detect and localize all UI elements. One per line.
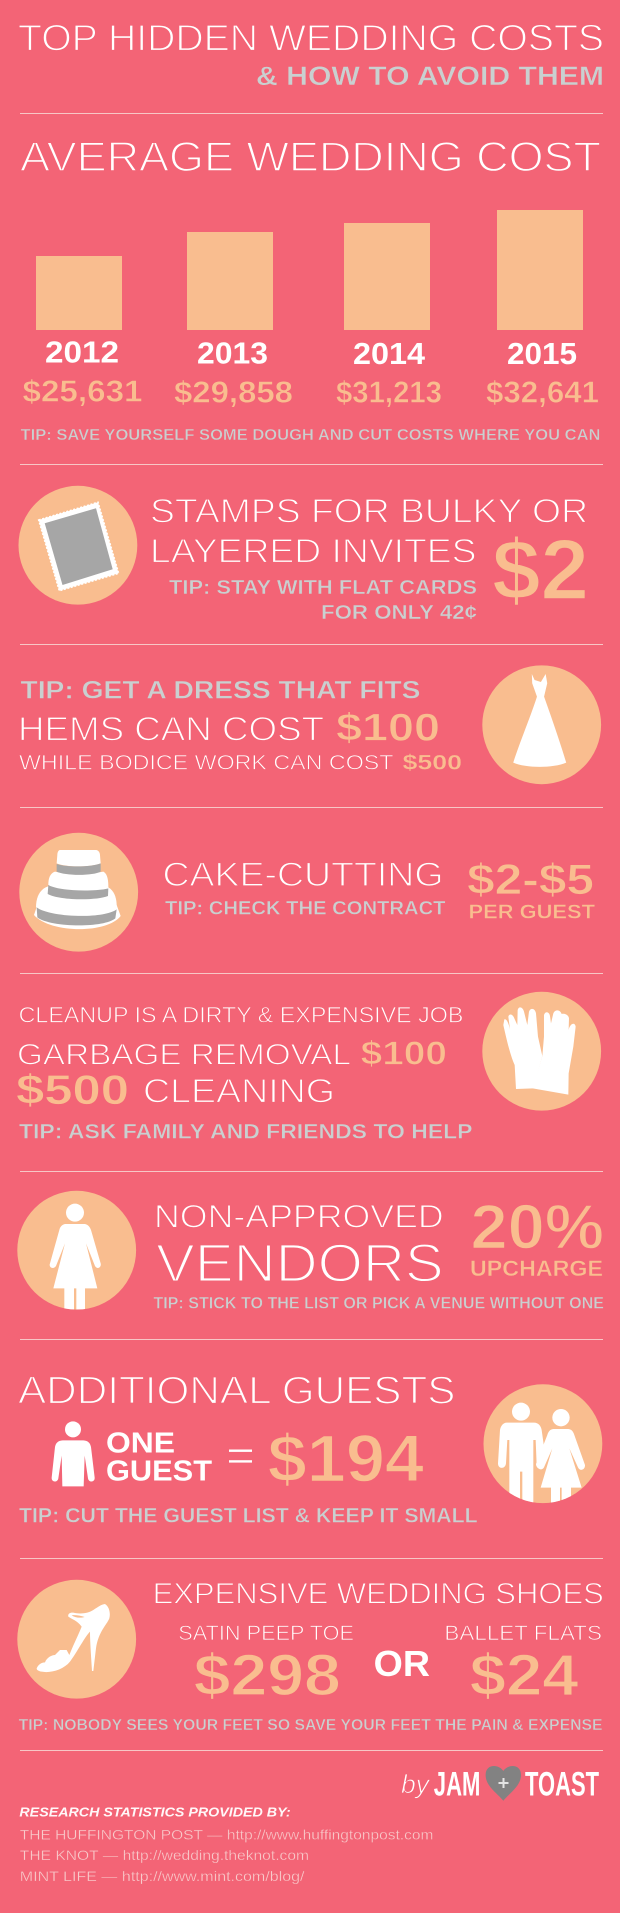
cost: PER GUEST bbox=[468, 901, 595, 923]
icon: stamp bbox=[18, 486, 137, 605]
ballet flats price: $24 bbox=[470, 1643, 578, 1708]
garbage removal cost: GARBAGE REMOVAL bbox=[17, 1039, 351, 1072]
heading: LAYERED INVITES bbox=[150, 532, 476, 570]
heading: STAMPS FOR BULKY OR bbox=[150, 493, 588, 531]
source list: THE KNOT — http://wedding.theknot.com bbox=[20, 1847, 309, 1863]
satin peep toe price: SATIN PEEP TOE bbox=[178, 1622, 354, 1645]
cost: $194 bbox=[268, 1422, 424, 1496]
source list: THE HUFFINGTON POST — http://www.huffingtonpost.com bbox=[20, 1826, 433, 1842]
header bbox=[18, 18, 604, 91]
one guest label bbox=[106, 1428, 212, 1488]
heading: ADDITIONAL GUESTS bbox=[18, 1369, 456, 1412]
source list: MINT LIFE — http://www.mint.com/blog/ bbox=[20, 1868, 305, 1884]
panel: dress bbox=[18, 665, 601, 784]
hem cost: $100 bbox=[336, 707, 440, 750]
cost: 20% bbox=[470, 1192, 604, 1262]
garbage removal cost bbox=[17, 1035, 447, 1072]
cost values: $25,631 bbox=[22, 374, 142, 409]
heading: NON-APPROVED bbox=[154, 1198, 444, 1234]
tip bbox=[169, 576, 477, 624]
icon: heart bbox=[486, 1766, 521, 1801]
tip: TIP: CUT THE GUEST LIST & KEEP IT SMALL bbox=[19, 1504, 478, 1527]
cost: UPCHARGE bbox=[470, 1256, 603, 1281]
year labels: 2012 bbox=[45, 335, 119, 370]
year labels: 2014 bbox=[353, 336, 426, 371]
logo: jam + toast: by bbox=[401, 1769, 431, 1799]
logo: jam + toast bbox=[401, 1766, 599, 1804]
tip: TIP: ASK FAMILY AND FRIENDS TO HELP bbox=[19, 1121, 472, 1144]
heading: AVERAGE WEDDING COST bbox=[20, 133, 601, 180]
tip: TIP: STICK TO THE LIST OR PICK A VENUE WITHOUT ONE bbox=[153, 1294, 604, 1312]
heading bbox=[150, 493, 588, 570]
sources bbox=[19, 1805, 433, 1884]
panel: stamps bbox=[18, 486, 589, 624]
heading: CAKE-CUTTING bbox=[162, 856, 444, 894]
icon: person bbox=[52, 1421, 95, 1486]
cleaning cost: $500 bbox=[16, 1066, 129, 1113]
icon: shoe bbox=[17, 1580, 136, 1699]
panel: cleanup bbox=[16, 992, 601, 1144]
panel: wedding shoes bbox=[17, 1577, 604, 1734]
bar chart bbox=[36, 210, 583, 330]
cleaning cost bbox=[16, 1066, 335, 1113]
year labels bbox=[45, 335, 577, 371]
cost: $2 bbox=[492, 523, 589, 618]
hem cost: HEMS CAN COST bbox=[18, 711, 324, 749]
icon: dress bbox=[482, 665, 601, 784]
cost values: $29,858 bbox=[174, 374, 293, 410]
cost bbox=[467, 856, 595, 923]
tip: TIP: GET A DRESS THAT FITS bbox=[20, 677, 420, 705]
garbage removal cost: $100 bbox=[361, 1035, 447, 1072]
bodice cost: WHILE BODICE WORK CAN COST bbox=[19, 750, 394, 774]
satin peep toe price bbox=[178, 1622, 354, 1708]
tip: FOR ONLY 42¢ bbox=[321, 601, 477, 624]
tip: TIP: STAY WITH FLAT CARDS bbox=[169, 576, 477, 599]
one guest label: ONE bbox=[106, 1428, 175, 1460]
subtitle: & HOW TO AVOID THEM bbox=[256, 61, 604, 91]
heading: EXPENSIVE WEDDING SHOES bbox=[153, 1577, 604, 1610]
tip: TIP: CHECK THE CONTRACT bbox=[165, 898, 446, 919]
panel: average wedding cost bbox=[20, 133, 601, 444]
cost: $2-$5 bbox=[467, 856, 594, 904]
ballet flats price bbox=[444, 1622, 602, 1708]
panel: cake cutting bbox=[19, 833, 595, 952]
panel: additional guests bbox=[18, 1369, 602, 1527]
heading: VENDORS bbox=[156, 1234, 444, 1294]
tip: TIP: NOBODY SEES YOUR FEET SO SAVE YOUR FEET THE PAIN & EXPENSE bbox=[19, 1717, 603, 1734]
heading: CLEANUP IS A DIRTY & EXPENSIVE JOB bbox=[19, 1002, 463, 1027]
satin peep toe price: $298 bbox=[194, 1643, 341, 1708]
year labels: 2015 bbox=[507, 336, 577, 371]
heading bbox=[154, 1198, 444, 1294]
cleaning cost: CLEANING bbox=[143, 1073, 335, 1111]
icon: couple bbox=[484, 1384, 602, 1510]
bodice cost: $500 bbox=[402, 750, 462, 774]
title: TOP HIDDEN WEDDING COSTS bbox=[18, 18, 604, 58]
panel: non-approved vendors bbox=[17, 1191, 604, 1312]
icon: cake bbox=[19, 833, 138, 952]
year labels: 2013 bbox=[197, 335, 268, 370]
hem cost bbox=[18, 707, 440, 750]
cost values bbox=[22, 374, 599, 410]
source list bbox=[20, 1826, 433, 1884]
cost values: $31,213 bbox=[336, 374, 442, 410]
icon: woman bbox=[17, 1191, 136, 1310]
cost values: $32,641 bbox=[486, 374, 599, 410]
equals sign bbox=[229, 1450, 252, 1463]
or label: OR bbox=[374, 1643, 430, 1684]
tip: TIP: SAVE YOURSELF SOME DOUGH AND CUT COSTS WHERE YOU CAN bbox=[20, 427, 600, 444]
one guest label: GUEST bbox=[106, 1456, 212, 1488]
icon: gloves bbox=[482, 992, 601, 1111]
ballet flats price: BALLET FLATS bbox=[444, 1622, 602, 1645]
logo: jam + toast: JAM bbox=[434, 1766, 480, 1804]
sources heading: RESEARCH STATISTICS PROVIDED BY: bbox=[19, 1805, 291, 1820]
